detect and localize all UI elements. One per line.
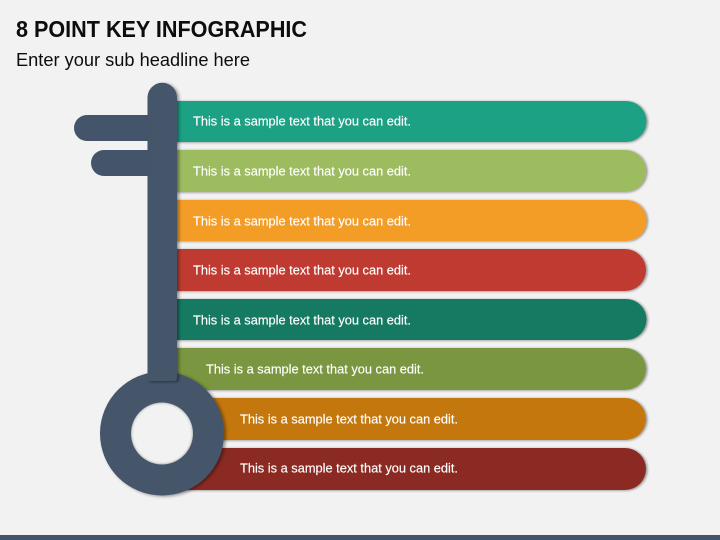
row 8 bar: This is a sample text that you can edit. bbox=[240, 460, 458, 476]
key tooth upper bbox=[74, 115, 150, 141]
icon: key bbox=[74, 83, 224, 496]
key tooth lower bbox=[91, 150, 150, 176]
row 7 bar: This is a sample text that you can edit. bbox=[240, 412, 458, 426]
row 6 bar bbox=[170, 348, 646, 390]
row 8 bar bbox=[170, 448, 646, 490]
subtitle: Enter your sub headline here bbox=[16, 50, 250, 70]
row 2 bar: This is a sample text that you can edit. bbox=[193, 164, 411, 178]
row 6 bar: This is a sample text that you can edit. bbox=[206, 362, 424, 376]
bars panel: eight sample text rows bbox=[170, 101, 646, 490]
row 2 bar bbox=[170, 150, 646, 192]
key ring bbox=[100, 372, 224, 496]
row 7 bar bbox=[170, 398, 646, 440]
row 1 bar bbox=[170, 101, 646, 142]
row 1 bar: This is a sample text that you can edit. bbox=[193, 114, 411, 128]
footer bar bbox=[0, 535, 720, 540]
row 5 bar bbox=[170, 299, 646, 340]
key shaft bbox=[148, 83, 177, 381]
row 3 bar: This is a sample text that you can edit. bbox=[193, 214, 411, 228]
row 3 bar bbox=[170, 200, 646, 241]
row 4 bar: This is a sample text that you can edit. bbox=[193, 262, 411, 278]
row 5 bar: This is a sample text that you can edit. bbox=[193, 312, 411, 328]
row 4 bar bbox=[170, 249, 646, 291]
title: 8 POINT KEY INFOGRAPHIC bbox=[16, 16, 307, 42]
